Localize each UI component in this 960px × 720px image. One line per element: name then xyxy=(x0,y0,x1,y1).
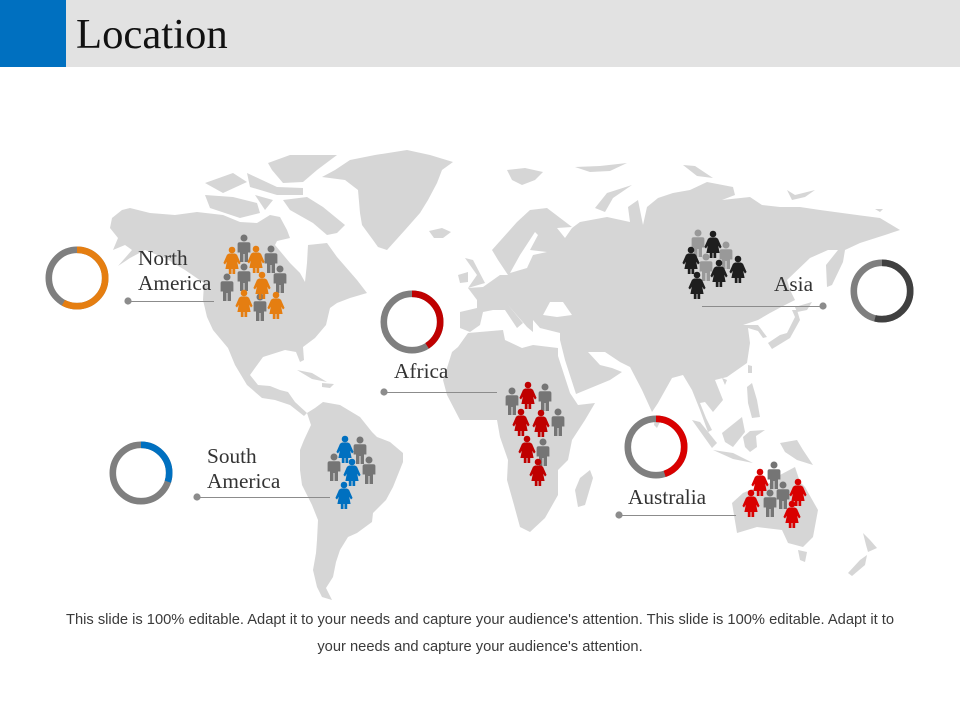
Arctic Eurasia islands xyxy=(507,163,883,212)
label: North America: America xyxy=(138,271,212,295)
Southeast Asia islands xyxy=(654,365,813,465)
Madagascar xyxy=(575,470,593,507)
Iceland xyxy=(429,228,451,238)
leader line: Australia xyxy=(615,511,736,519)
footer text: your needs and capture your audience's attention. xyxy=(317,639,643,655)
donut: Australia xyxy=(628,419,684,475)
Japan xyxy=(768,302,812,349)
leader line: Asia xyxy=(702,302,827,310)
South America xyxy=(300,402,403,600)
North America xyxy=(110,208,367,416)
label: South America: South xyxy=(207,444,257,468)
label: North America: North xyxy=(138,246,188,270)
leader line: North America xyxy=(124,297,214,305)
world map xyxy=(110,150,900,600)
title: Location xyxy=(76,11,228,58)
label: Asia: Asia xyxy=(774,272,814,296)
Tasmania xyxy=(798,550,807,562)
people: Australia xyxy=(742,462,807,528)
donut: North America xyxy=(49,250,105,306)
leader line: South America xyxy=(193,493,330,501)
Africa xyxy=(443,330,595,532)
label: Africa: Africa xyxy=(394,359,449,383)
people: Asia xyxy=(682,230,747,299)
inland seas xyxy=(510,232,572,317)
UK and Ireland xyxy=(458,258,485,288)
New Zealand xyxy=(848,533,877,576)
people: Africa xyxy=(506,382,564,486)
Australia xyxy=(732,467,818,547)
header blue accent xyxy=(0,0,66,67)
Caribbean islands xyxy=(297,370,334,388)
Eurasia xyxy=(460,182,900,432)
people: South America xyxy=(328,436,375,509)
donut: Africa xyxy=(384,294,440,350)
donut: South America xyxy=(113,445,169,501)
people: North America xyxy=(221,234,286,321)
Arctic islands xyxy=(205,155,345,235)
label: Australia: Australia xyxy=(628,485,707,509)
Greenland xyxy=(322,150,453,250)
label: South America: America xyxy=(207,469,281,493)
donut: Asia xyxy=(854,263,910,319)
footer text: This slide is 100% editable. Adapt it to your needs and capture your audience's attention. This slide is 100% editable. Adapt it to xyxy=(66,612,894,628)
header band xyxy=(0,0,960,67)
leader line: Africa xyxy=(380,388,497,396)
